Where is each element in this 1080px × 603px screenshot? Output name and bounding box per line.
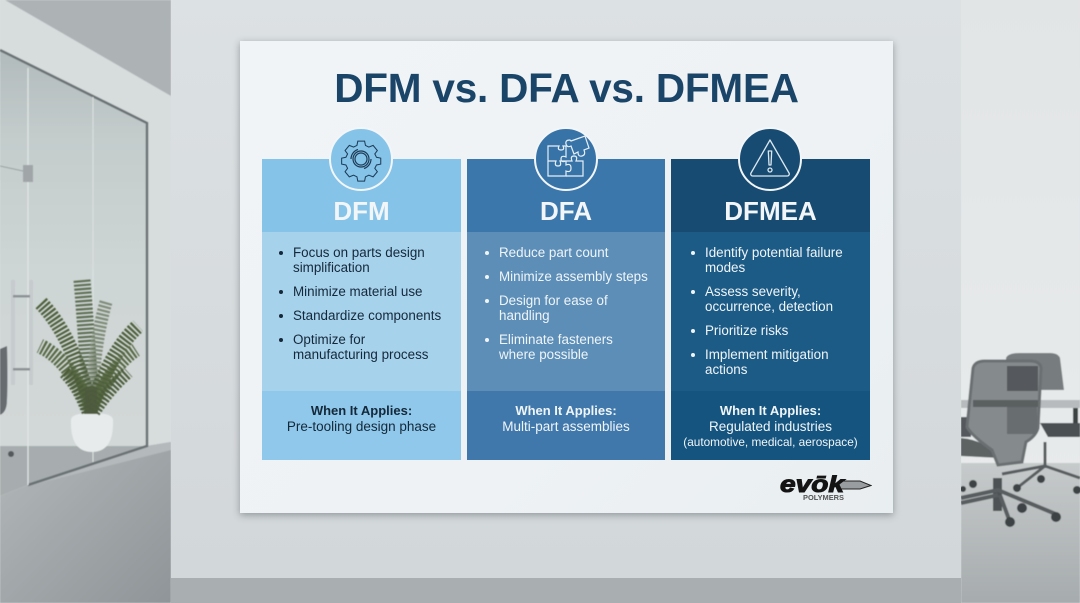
DFMEA when it applies	[671, 391, 870, 460]
DFM bullet list: simplification	[293, 260, 370, 275]
icon: gear	[329, 129, 393, 191]
DFA bullet list: Minimize assembly steps	[499, 269, 648, 284]
DFM when it applies	[262, 391, 461, 460]
DFM name: DFM	[333, 196, 390, 226]
DFMEA bullet list: Assess severity,	[705, 284, 801, 299]
DFMEA header	[671, 159, 870, 232]
DFM bullet list: Optimize for	[293, 332, 365, 347]
DFA header	[467, 159, 665, 232]
plant	[40, 280, 138, 452]
DFA bullet list: Design for ease of	[499, 293, 608, 308]
floor strip	[171, 578, 961, 603]
DFMEA when it applies: (automotive, medical, aerospace)	[683, 435, 858, 449]
DFA when it applies: When It Applies:	[515, 403, 617, 418]
DFA bullet list: Eliminate fasteners	[499, 332, 613, 347]
board	[240, 41, 893, 513]
DFMEA bullet list: Implement mitigation	[705, 347, 829, 362]
DFA bullet list: Reduce part count	[499, 245, 608, 260]
DFM bullet list: Minimize material use	[293, 284, 422, 299]
DFM header	[262, 159, 461, 232]
DFMEA bullet list: actions	[705, 362, 747, 377]
DFM bullet list: Standardize components	[293, 308, 441, 323]
feature wall	[171, 0, 961, 578]
logo: evok polymers	[780, 475, 872, 501]
right room	[960, 0, 1080, 603]
panel: DFM	[262, 129, 461, 460]
DFA when it applies	[467, 391, 665, 460]
DFMEA bullet list	[671, 232, 870, 391]
DFMEA bullet list: Identify potential failure	[705, 245, 843, 260]
DFMEA when it applies: Regulated industries	[709, 418, 832, 434]
DFA bullet list: handling	[499, 308, 550, 323]
DFM when it applies: When It Applies:	[311, 403, 412, 418]
DFA when it applies: Multi-part assemblies	[502, 418, 630, 434]
DFA bullet list	[467, 232, 665, 391]
icon: puzzle	[534, 129, 598, 191]
DFMEA name: DFMEA	[724, 196, 817, 226]
panel: DFA	[467, 129, 665, 460]
DFA bullet list: where possible	[499, 347, 588, 362]
title: DFM vs. DFA vs. DFMEA	[334, 65, 799, 111]
left room	[0, 0, 171, 603]
icon: warning	[738, 129, 802, 191]
DFM bullet list	[262, 232, 461, 391]
DFMEA bullet list: occurrence, detection	[705, 299, 833, 314]
DFMEA bullet list: Prioritize risks	[705, 323, 788, 338]
DFMEA when it applies: When It Applies:	[720, 403, 821, 418]
DFM when it applies: Pre-tooling design phase	[287, 418, 436, 434]
DFMEA bullet list: modes	[705, 260, 745, 275]
DFA name: DFA	[540, 196, 592, 226]
DFM bullet list: Focus on parts design	[293, 245, 425, 260]
panel: DFMEA	[671, 129, 870, 460]
DFM bullet list: manufacturing process	[293, 347, 428, 362]
